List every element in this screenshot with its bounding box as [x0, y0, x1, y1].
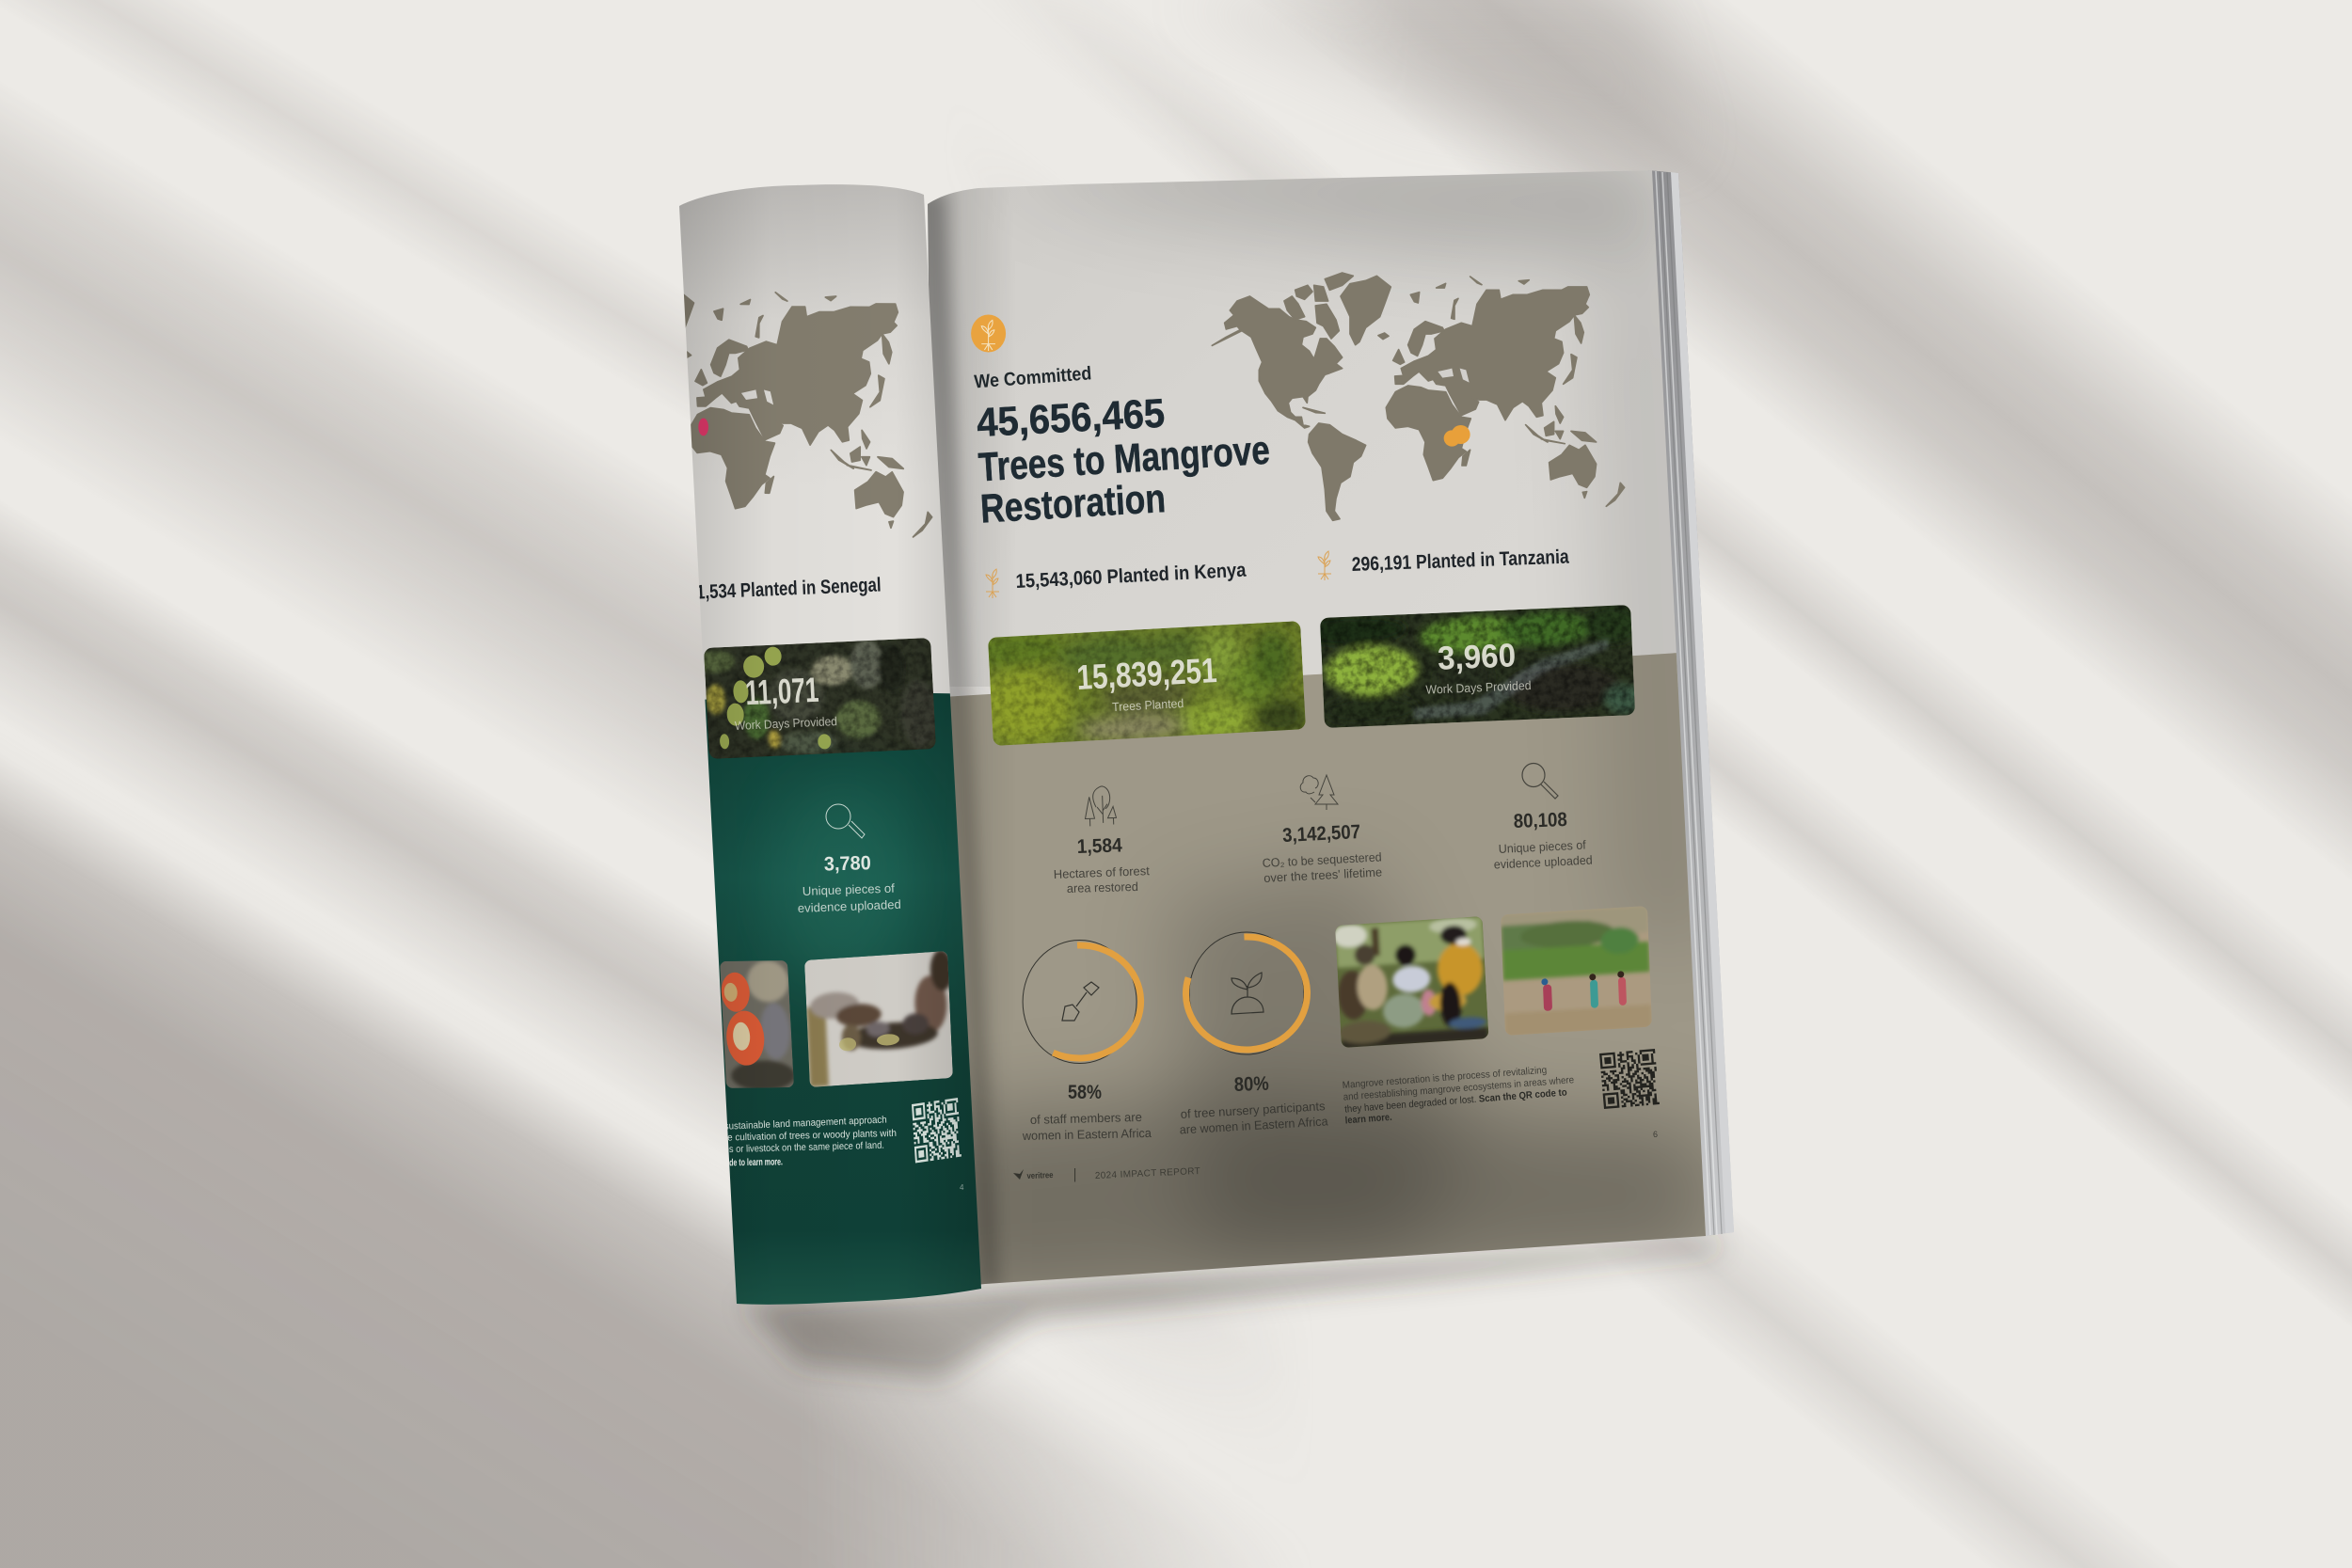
stat: evidence uploaded: evidence uploaded: [1493, 853, 1593, 871]
description: agroforestry: is a sustainable land management approach: [707, 1115, 887, 1132]
heading: Trees to Mangrove: [977, 428, 1271, 490]
stat: CO2 sequestered: over the trees' lifetime: [1263, 864, 1382, 885]
photo: papaya: [720, 960, 796, 1091]
roll shadow on right page: [924, 195, 999, 1289]
stat: evidence uploaded on roll: evidence uploaded: [798, 897, 901, 915]
description: agroforestry: code to learn more.: [722, 1156, 783, 1168]
roll lighting overlay: [659, 179, 997, 1317]
stat: 3,960: Work Days Provided: [1425, 678, 1532, 697]
stat: evidence uploaded: [1493, 764, 1593, 871]
icon: seedling: [1232, 973, 1263, 1014]
donut: 80% nursery: of tree nursery participants: [1180, 1099, 1326, 1121]
description: mangrove restoration: [1342, 1065, 1575, 1126]
stat: forest restored: area restored: [1067, 879, 1138, 895]
world map with Kenya and Tanzania highlighted: [1212, 273, 1625, 520]
icon: sprout Tanzania: [1318, 551, 1331, 580]
donut: 58% staff: women in Eastern Africa: [1022, 1126, 1152, 1143]
stat: CO2 sequestered: 3,142,507: [1282, 821, 1361, 847]
veritree logo: [1013, 1169, 1054, 1180]
stat: 15,839,251: 15,839,251: [1075, 650, 1218, 697]
stat: forest restored: [1054, 785, 1150, 895]
QR code left page: [912, 1099, 961, 1162]
donut: 58% staff: 58%: [1068, 1082, 1102, 1103]
green lower area of roll: [659, 693, 997, 1317]
icon: magnifier: [1522, 764, 1558, 799]
QR code right page: [1599, 1050, 1660, 1108]
stat: evidence uploaded on roll: [798, 804, 901, 915]
description: agroforestry: the cultivation of trees or woody plants with: [720, 1128, 897, 1144]
stat: 3,960: [1423, 637, 1532, 697]
icon: shovel: [1062, 982, 1099, 1021]
page number 6: 6: [1653, 1130, 1658, 1139]
icon: sprout Kenya: [986, 569, 999, 598]
world map with Senegal highlighted: [508, 287, 934, 552]
icon: trees: [1084, 785, 1117, 827]
stat: 15,839,251: [1075, 650, 1219, 716]
photo card: trees planted: [969, 618, 1307, 752]
stat: evidence uploaded on roll: 3,780: [824, 852, 871, 875]
stat: CO2 sequestered: CO₂ to be sequestered: [1262, 849, 1382, 870]
stat: 3,960: 3,960: [1437, 637, 1517, 677]
stat: 11,071: Work Days Provided: [734, 714, 837, 733]
planted in Senegal: 31,534 Planted in Senegal: [687, 574, 882, 604]
footer: [1013, 1166, 1200, 1181]
stat: CO2 sequestered: [1262, 775, 1382, 885]
light glow on green: [776, 781, 908, 988]
white upper area of roll: [659, 179, 997, 705]
heading: Restoration: [979, 476, 1167, 532]
donut: 80% nursery: are women in Eastern Africa: [1179, 1114, 1329, 1136]
photo card: olives: [696, 637, 940, 759]
stat: 15,839,251: Trees Planted: [1112, 696, 1184, 714]
stat: evidence uploaded: Unique pieces of: [1498, 837, 1586, 856]
page number 4: 4: [960, 1183, 964, 1192]
left rolled page: [508, 179, 997, 1317]
icon: magnifier: [826, 804, 865, 838]
stat: 11,071: 11,071: [744, 670, 819, 712]
orange badge icon: [971, 314, 1006, 352]
veritree logo: veritree: [1026, 1170, 1054, 1180]
description: agroforestry: crops or livestock on the same piece of land.: [712, 1140, 884, 1155]
taupe lower area of right page: [927, 652, 1712, 1298]
lighting overlays on the right page: [927, 150, 1722, 1307]
description: agroforestry: [707, 1115, 897, 1168]
right page: [922, 150, 1722, 1307]
magazine cast shadow: [743, 1240, 1724, 1378]
description: mangrove restoration: and reestablishing mangrove ecosystems in areas where: [1343, 1074, 1575, 1103]
white upper area of right page: [922, 160, 1712, 687]
stat: evidence uploaded: 80,108: [1513, 809, 1567, 832]
donut: 58% staff: of staff members are: [1030, 1110, 1142, 1127]
icon: cloud and tree: [1300, 775, 1338, 810]
donut: 80% nursery: 80%: [1233, 1073, 1269, 1096]
description: mangrove restoration: Mangrove restoration is the process of revitalizing: [1342, 1065, 1548, 1091]
donut: 80% nursery: [1179, 932, 1329, 1136]
photo: hands with seed pods: [804, 949, 958, 1087]
planted in Tanzania: 296,191 Planted in Tanzania: [1351, 546, 1569, 576]
footer: 2024 IMPACT REPORT: [1095, 1166, 1200, 1181]
stat: forest restored: 1,584: [1076, 834, 1122, 858]
donut: 58% staff: [1017, 941, 1152, 1143]
description: mangrove restoration: they have been degraded or lost. Scan the QR code to: [1344, 1086, 1567, 1116]
photo: women seated: [1332, 916, 1489, 1050]
stat: 11,071: [732, 669, 837, 733]
description: mangrove restoration: learn more.: [1344, 1112, 1392, 1126]
photo card: work days Kenya: [1292, 604, 1646, 729]
photo: women walking in field: [1501, 906, 1652, 1037]
planted in Kenya: 15,543,060 Planted in Kenya: [1015, 560, 1247, 593]
page edge block: [1648, 170, 1734, 1236]
eyebrow: We Committed: We Committed: [974, 363, 1092, 392]
stat: evidence uploaded on roll: Unique pieces of: [803, 881, 895, 898]
stat: forest restored: Hectares of forest: [1054, 863, 1150, 881]
heading: 45,656,465: [976, 391, 1166, 446]
heading: [977, 399, 1269, 523]
